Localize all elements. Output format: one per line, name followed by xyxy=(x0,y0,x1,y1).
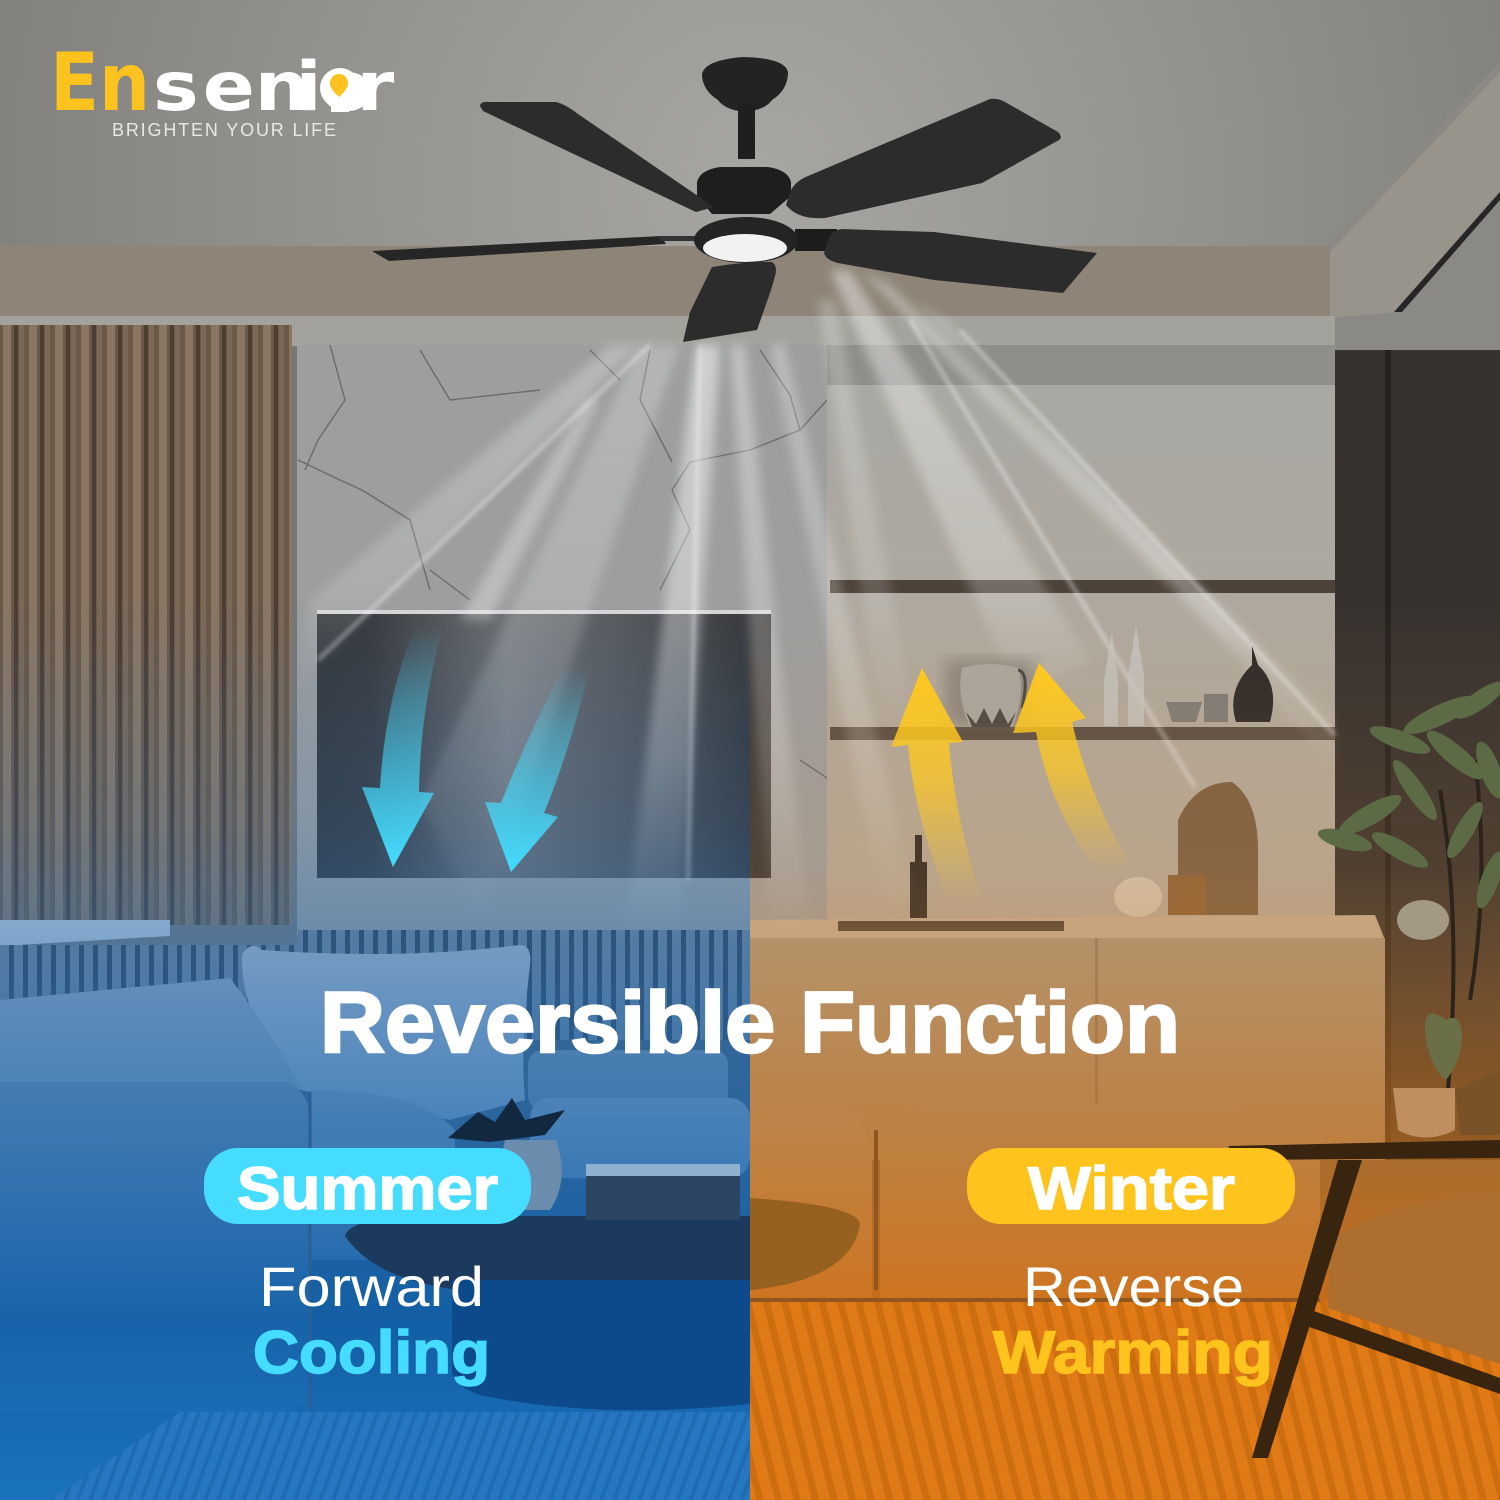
bottle xyxy=(910,862,927,918)
stems xyxy=(1440,760,1481,1090)
winter label: Winter xyxy=(1028,1155,1235,1222)
leaves xyxy=(1316,675,1500,911)
light air rays right xyxy=(818,270,1335,770)
cooling arrow 1 xyxy=(362,627,443,867)
books xyxy=(586,1164,740,1184)
left seat xyxy=(750,1100,872,1300)
dark teapot xyxy=(1233,646,1273,722)
shelf shadow xyxy=(945,660,1035,726)
kitchen wall xyxy=(827,385,1337,920)
jug base pattern xyxy=(966,708,1016,727)
side table column xyxy=(452,1280,750,1410)
warming arrow 1 xyxy=(891,668,983,902)
side table top xyxy=(345,1216,750,1290)
plant leaves xyxy=(448,1098,565,1142)
soft streak lines xyxy=(318,320,1335,880)
cabinets xyxy=(750,938,1385,1168)
jug xyxy=(960,664,1021,727)
dark wood panel xyxy=(1335,350,1500,1160)
downrod xyxy=(738,104,755,159)
blade left xyxy=(372,236,666,261)
right rug xyxy=(750,1302,1500,1500)
cushion seams xyxy=(750,1130,1320,1300)
vase xyxy=(502,1140,562,1210)
sofa arm xyxy=(0,1082,310,1412)
bowl and cup xyxy=(1166,694,1228,722)
blade top left xyxy=(480,102,714,212)
marble wall xyxy=(297,345,827,935)
logo word En: En xyxy=(50,36,150,129)
curtain xyxy=(0,325,292,925)
slatted wall xyxy=(298,930,750,1130)
flower xyxy=(1397,900,1449,940)
shelf items xyxy=(945,625,1273,727)
sofa left xyxy=(0,945,750,1412)
left rug xyxy=(50,1412,750,1500)
counter xyxy=(750,915,1385,940)
tagline: BRIGHTEN YOUR LIFE xyxy=(112,120,336,140)
canopy xyxy=(702,57,788,112)
ceiling beam xyxy=(0,246,1330,318)
right ceiling recess xyxy=(1325,62,1500,380)
glass bottles xyxy=(1104,625,1144,726)
LED light xyxy=(703,234,787,262)
summer label: Summer xyxy=(237,1155,498,1222)
right sofa back xyxy=(528,1050,728,1110)
kettle jar xyxy=(1114,877,1162,917)
bulb icon xyxy=(320,68,360,112)
warming arrow 2 xyxy=(1013,663,1130,872)
arrows xyxy=(362,627,1130,902)
sofa seam xyxy=(308,1092,312,1410)
sofa right xyxy=(750,1100,1320,1300)
back cushion small xyxy=(0,978,302,1090)
forward text: Forward xyxy=(259,1255,484,1318)
logo word senior: senior xyxy=(153,48,395,127)
upper shelf xyxy=(830,580,1335,593)
motor housing xyxy=(697,167,791,214)
lower shelf xyxy=(830,727,1335,740)
back cushion large xyxy=(242,945,530,1120)
TV xyxy=(317,612,771,878)
chair cushion xyxy=(1328,1192,1500,1364)
blue tint overlay xyxy=(0,600,750,1500)
plant xyxy=(1316,675,1500,1138)
jug handle xyxy=(1018,670,1025,708)
lower left wall shade xyxy=(0,1040,750,1500)
hanging leaf xyxy=(1425,1013,1462,1080)
warming text: Warming xyxy=(993,1319,1273,1386)
summer column xyxy=(204,1148,531,1386)
basket xyxy=(1455,1070,1500,1135)
fan xyxy=(372,57,1097,342)
orange foreground objects xyxy=(750,1130,1500,1500)
book stack xyxy=(586,1176,740,1220)
left counter xyxy=(0,920,170,946)
summer pill xyxy=(204,1148,531,1224)
cutting board xyxy=(1178,782,1258,915)
large seat cushion xyxy=(880,1104,1320,1300)
mug xyxy=(1393,1088,1455,1138)
marble cracks xyxy=(298,345,830,780)
right sofa seat xyxy=(530,1098,750,1178)
light rim xyxy=(694,217,798,263)
blade right xyxy=(824,229,1097,293)
reverse text: Reverse xyxy=(1023,1255,1244,1318)
cooling text: Cooling xyxy=(253,1319,490,1386)
blue foreground objects xyxy=(50,1092,750,1500)
title: Reversible Function xyxy=(320,975,1180,1071)
lower right wall xyxy=(750,1160,1500,1500)
blade top right xyxy=(786,99,1061,218)
seat cushion xyxy=(310,1090,455,1260)
winter pill xyxy=(967,1148,1295,1224)
orange tint overlay xyxy=(750,600,1500,1500)
cooling arrow 2 xyxy=(485,667,590,872)
blade bottom xyxy=(683,262,776,342)
right wall band xyxy=(827,345,1337,387)
round stool xyxy=(750,1198,860,1290)
chair frame xyxy=(1228,1140,1500,1458)
ceiling xyxy=(0,0,1500,246)
logo xyxy=(50,36,395,140)
arm right xyxy=(795,229,837,251)
light air rays left xyxy=(300,345,915,930)
winter column xyxy=(967,1148,1295,1386)
